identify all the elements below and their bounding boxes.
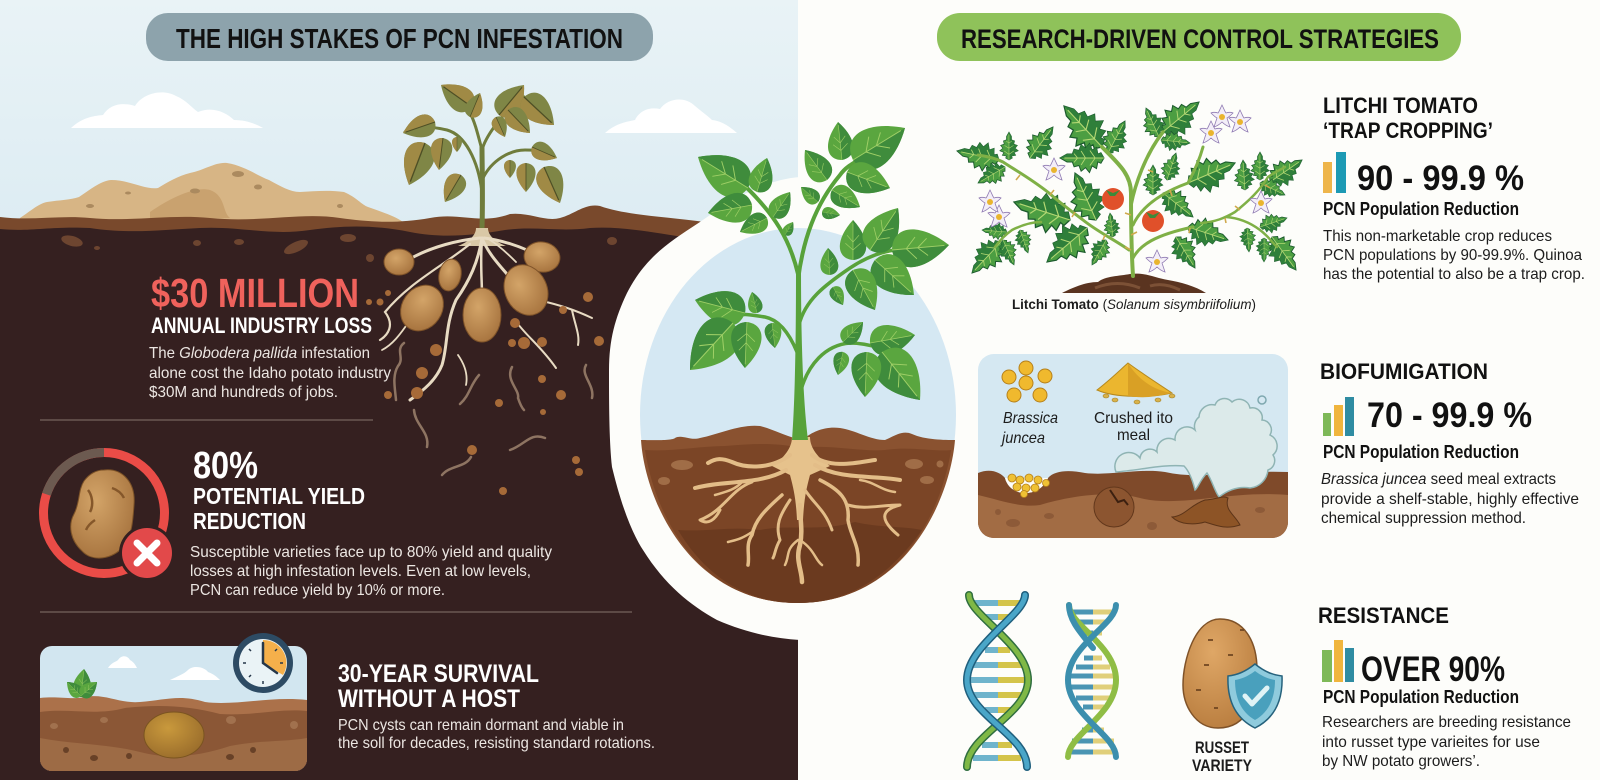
panel: central healthy plant: [640, 111, 956, 603]
bars icon: [1323, 152, 1346, 193]
block: resistance: PCN Population Reduction: [1323, 687, 1519, 707]
block: resistance: by NW potato growers’.: [1322, 753, 1480, 770]
stat: 80% yield reduction: PCN can reduce yield by 10% or more.: [190, 582, 445, 599]
label: russet variety: VARIETY: [1192, 756, 1253, 775]
block: biofumigation: BIOFUMIGATION: [1320, 359, 1488, 384]
healthy leaves: [674, 111, 951, 413]
sky circle: [640, 228, 956, 602]
labels: [1000, 410, 1173, 447]
stat: $30 million loss: $30 MILLION: [151, 270, 359, 316]
block: resistance: OVER 90%: [1361, 650, 1505, 689]
stat: 80% yield reduction: POTENTIAL YIELD: [193, 483, 365, 509]
stat: $30 million loss: The Globodera pallida infestation: [149, 345, 370, 362]
block: resistance: [1318, 603, 1571, 770]
seeds in furrow: [1008, 474, 1050, 498]
icon: DNA helix one: [967, 595, 1028, 767]
block: trap cropping: 90 - 99.9 %: [1357, 159, 1524, 198]
block: trap cropping: [1323, 93, 1585, 283]
dark soil: [0, 225, 798, 780]
stat: $30 million loss: $30M and hundreds of jobs.: [149, 384, 338, 401]
heading pill: high stakes: [146, 13, 653, 61]
stat: 30-year survival: [338, 660, 655, 752]
labels: juncea: [1000, 430, 1045, 447]
labels: Crushed ito: [1094, 410, 1173, 427]
block: biofumigation: Brassica juncea seed meal extracts: [1321, 471, 1556, 488]
card: dormant cyst in soil: [40, 646, 307, 771]
icon: infected roots and tubers: [366, 228, 604, 495]
block: trap cropping: PCN populations by 90-99.9%. Quinoa: [1323, 247, 1582, 264]
stat: $30 million loss: ANNUAL INDUSTRY LOSS: [151, 313, 372, 338]
block: trap cropping: has the potential to also be a trap crop.: [1323, 266, 1585, 283]
block: trap cropping: LITCHI TOMATO: [1323, 93, 1478, 118]
block: biofumigation: 70 - 99.9 %: [1367, 396, 1532, 435]
stat: 30-year survival: 30-YEAR SURVIVAL: [338, 660, 539, 688]
bars icon: [1322, 640, 1354, 682]
sky: [0, 0, 798, 260]
panel: the high stakes of PCN infestation: [0, 0, 798, 780]
icon: wilting potato plant: [395, 75, 572, 228]
heading pill: high stakes: THE HIGH STAKES OF PCN INFESTATION: [176, 23, 623, 54]
stat: 80% yield reduction: [190, 445, 552, 599]
block: resistance: RESISTANCE: [1318, 603, 1449, 628]
icon: ruptured cysts: [1094, 487, 1240, 527]
block: biofumigation: provide a shelf-stable, highly effective: [1321, 491, 1579, 508]
icon: yield ring with potato and cross: [28, 437, 180, 589]
block: resistance: Researchers are breeding resistance: [1322, 714, 1571, 731]
stat: 80% yield reduction: REDUCTION: [193, 508, 306, 534]
soil: [641, 426, 955, 603]
bars icon: [1323, 397, 1354, 436]
label: russet variety: [1192, 738, 1253, 775]
stat: 80% yield reduction: losses at high infestation levels. Even at low levels,: [190, 563, 531, 580]
stat: 30-year survival: the soll for decades, resisting standard rotations.: [338, 735, 655, 752]
clouds: [71, 92, 737, 133]
heading pill: control strategies: [937, 13, 1461, 61]
stat: 80% yield reduction: Susceptible varieties face up to 80% yield and quality: [190, 544, 552, 561]
roots: [695, 437, 900, 582]
heading pill: control strategies: RESEARCH-DRIVEN CONTROL STRATEGIES: [961, 24, 1439, 54]
icon: DNA helix two: [1068, 605, 1116, 757]
thorns: [1016, 170, 1270, 250]
block: resistance: into russet type varieites for use: [1322, 734, 1540, 751]
labels: Brassica: [1003, 410, 1058, 427]
topsoil band: [0, 205, 705, 238]
icon: fumigant cloud: [1115, 398, 1277, 497]
white divider circle: [609, 177, 800, 640]
block: trap cropping: PCN Population Reduction: [1323, 199, 1519, 219]
card: biofumigation illustration: [978, 354, 1288, 538]
stat: $30 million loss: [149, 270, 391, 401]
sand hills: [20, 163, 403, 224]
icon: clock: [233, 633, 293, 693]
block: trap cropping: ‘TRAP CROPPING’: [1323, 118, 1493, 143]
block: trap cropping: This non-marketable crop reduces: [1323, 228, 1552, 245]
stems: [735, 158, 895, 440]
block: biofumigation: chemical suppression method.: [1321, 510, 1526, 527]
icon: nematode worms: [394, 343, 592, 475]
block: biofumigation: [1320, 359, 1579, 527]
label: russet variety: RUSSET: [1195, 738, 1249, 757]
icon: seed meal pile: [1097, 363, 1175, 404]
soil pebbles: [60, 233, 617, 262]
stat: $30 million loss: alone cost the Idaho potato industry: [149, 365, 391, 382]
caption: litchi tomato: Litchi Tomato (Solanum sisymbriifolium): [1012, 296, 1256, 312]
stat: 30-year survival: PCN cysts can remain dormant and viable in: [338, 717, 624, 734]
labels: meal: [1117, 427, 1150, 444]
illustration: litchi tomato plant: [954, 90, 1309, 293]
icon: mustard seeds: [1002, 361, 1052, 402]
stat: 30-year survival: WITHOUT A HOST: [338, 685, 520, 713]
icon: russet potato with shield: [1183, 619, 1282, 728]
block: biofumigation: PCN Population Reduction: [1323, 442, 1519, 462]
stat: 80% yield reduction: 80%: [193, 445, 258, 487]
